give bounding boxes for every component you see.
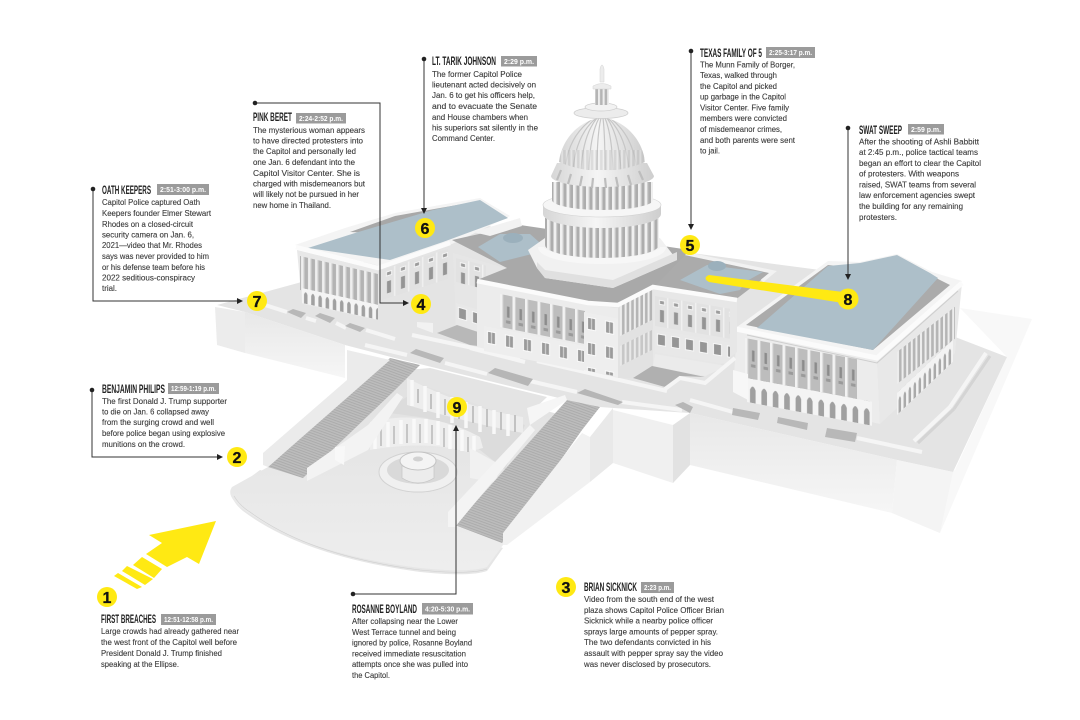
- Senate south facade: [378, 245, 455, 320]
- text block: oath keepers: or his defense team before his: [102, 262, 206, 272]
- fountain: [379, 452, 457, 492]
- text block: benjamin philips: to die on Jan. 6 collapsed away: [102, 406, 210, 416]
- text block: texas family of 5: [700, 46, 815, 156]
- marker 1: [97, 587, 117, 607]
- text block: benjamin philips: before police began using explosive: [102, 428, 225, 438]
- left roof slate patch: [478, 234, 548, 262]
- text block: texas family of 5: the Capitol and picked: [700, 81, 777, 91]
- terrace: front retaining walls: [215, 307, 953, 533]
- text block: texas family of 5: members were convicted: [700, 113, 787, 123]
- marker 1: 1: [103, 590, 112, 607]
- text block: oath keepers: Capitol Police captured Oath: [102, 197, 200, 207]
- text block: first breaches: [101, 612, 239, 669]
- link block: [453, 253, 505, 345]
- marker 4: 4: [417, 297, 426, 314]
- text block: swat sweep: [859, 123, 981, 222]
- text block: lt. tarik johnson: [432, 54, 538, 143]
- text block: brian sicknick: was never disclosed by prosecutors.: [583, 659, 711, 669]
- text block: rosanne boyland: After collapsing near the Lower: [352, 616, 458, 626]
- text block: benjamin philips: munitions on the crowd.: [102, 439, 185, 449]
- lantern rings: [574, 103, 628, 118]
- curved front wall: [370, 417, 483, 452]
- dome base: [528, 238, 677, 288]
- marker 6: [415, 218, 435, 238]
- text block: first breaches: the west front of the Capitol well before: [101, 637, 237, 647]
- text block: rosanne boyland: West Terrace tunnel and being: [352, 627, 456, 637]
- text block: oath keepers: security camera on Jan. 6,: [102, 230, 194, 240]
- text block: oath keepers: 2:51-3:00 p.m.: [160, 187, 206, 194]
- text block: pink beret: 2:24-2:52 p.m.: [299, 116, 343, 123]
- text block: pink beret: will likely not be pursued in her: [252, 189, 359, 199]
- text block: texas family of 5: up garbage in the Capitol: [700, 92, 786, 102]
- Senate wing: [295, 198, 510, 346]
- text block: swat sweep: at 2:45 p.m., police tactical teams: [859, 147, 979, 157]
- text block: brian sicknick: The two defendants convicted in his: [584, 637, 712, 647]
- Senate roof: [295, 198, 510, 266]
- text block: pink beret: one Jan. 6 defendant into the: [253, 157, 355, 167]
- text block: benjamin philips: 12:59-1:19 p.m.: [171, 386, 216, 393]
- text block: brian sicknick: [583, 580, 724, 669]
- right stair walls: [448, 395, 613, 545]
- text block: swat sweep: of protesters. With weapons: [859, 168, 960, 178]
- House front facade: [733, 330, 880, 424]
- text block: oath keepers: 2022 seditious-conspiracy: [102, 272, 196, 282]
- text block: texas family of 5: Texas, walked through: [700, 70, 777, 80]
- leader: rosanne boyland: [351, 425, 459, 596]
- center corner facade: [618, 288, 653, 378]
- marker 3: [556, 577, 576, 597]
- marker 2: 2: [233, 450, 242, 467]
- marker 9: [447, 397, 467, 417]
- text block: lt. tarik johnson: Jan. 6 to get his officers help,: [432, 90, 535, 100]
- text block: swat sweep: After the shooting of Ashli Babbitt: [859, 136, 980, 146]
- leader: texas family: [688, 49, 694, 230]
- text block: pink beret: [252, 110, 366, 210]
- text block: oath keepers: Rhodes on a closed-circuit: [102, 219, 194, 229]
- text block: oath keepers: Keepers founder Elmer Stewart: [102, 208, 212, 218]
- text block: first breaches: Large crowds had already gathered near: [101, 626, 239, 636]
- text block: texas family of 5: The Munn Family of Borger,: [700, 60, 795, 70]
- text block: benjamin philips: [102, 382, 227, 449]
- yellow breach arrow: [114, 521, 216, 589]
- text block: lt. tarik johnson: his superiors sat silently in the: [432, 122, 538, 132]
- text block: pink beret: the Capitol and personally led: [253, 146, 356, 156]
- text block: swat sweep: 2:59 p.m.: [911, 127, 941, 134]
- leader: swat sweep: [845, 126, 851, 280]
- text block: swat sweep: raised, SWAT teams from several: [859, 180, 976, 190]
- terrace: main deck: [217, 225, 1007, 472]
- text block: swat sweep: protesters.: [859, 212, 897, 222]
- upper drum: [552, 182, 653, 210]
- text block: brian sicknick: Sicknick while a nearby police officer: [584, 616, 713, 626]
- upper terrace floor: [407, 368, 547, 420]
- Senate west facade: [297, 250, 378, 320]
- right link facade: [653, 288, 737, 377]
- colonnade base ring: [541, 247, 663, 261]
- House roof: [737, 254, 962, 358]
- terrace: rails and small steps: [265, 305, 990, 452]
- text block: oath keepers: [102, 183, 212, 293]
- roof slate patch, right link: [680, 265, 763, 294]
- text block: texas family of 5: TEXAS FAMILY OF 5: [700, 46, 762, 60]
- leader: pink beret: [253, 101, 409, 306]
- House east facade: [877, 283, 962, 424]
- text block: brian sicknick: plaza shows Capitol Police Officer Brian: [584, 605, 724, 615]
- dome: [528, 65, 677, 288]
- text block: pink beret: PINK BERET: [253, 110, 292, 124]
- marker 6: 6: [421, 221, 430, 238]
- text block: pink beret: charged with misdemeanors but: [253, 178, 366, 188]
- text block: first breaches: President Donald J. Trump finished: [101, 648, 222, 658]
- marker 8: 8: [844, 292, 853, 309]
- main colonnade: [545, 218, 659, 258]
- center roof: [452, 225, 690, 303]
- text block: brian sicknick: BRIAN SICKNICK: [584, 580, 637, 594]
- text block: pink beret: to have directed protesters into: [253, 136, 363, 146]
- marker 2: [227, 447, 247, 467]
- lower ring: [543, 205, 661, 228]
- marker 5: [680, 235, 700, 255]
- leader: tarik johnson: [421, 57, 427, 214]
- text block: lt. tarik johnson: 2:29 p.m.: [504, 59, 534, 66]
- marker 7: [247, 291, 267, 311]
- marker 5: 5: [686, 238, 695, 255]
- text block: oath keepers: OATH KEEPERS: [102, 183, 151, 197]
- text block: first breaches: 12:51-12:58 p.m.: [164, 617, 213, 624]
- text block: pink beret: new home in Thailand.: [253, 200, 331, 210]
- marker 4: [411, 294, 431, 314]
- lantern colonnade: [595, 86, 609, 105]
- text block: oath keepers: 2021—video that Mr. Rhodes: [102, 240, 203, 250]
- text block: texas family of 5: of misdemeanor crimes,: [700, 124, 782, 134]
- plaza: lower west terrace: [230, 350, 613, 574]
- dome ribs: [559, 118, 645, 170]
- text block: benjamin philips: from the surging crowd and well: [102, 417, 214, 427]
- flared band: [551, 163, 654, 187]
- center building: [452, 218, 737, 389]
- text block: texas family of 5: to jail.: [700, 146, 720, 156]
- marker 8: [838, 288, 858, 310]
- left staircase: [268, 358, 420, 478]
- text block: rosanne boyland: the Capitol.: [352, 670, 390, 680]
- text block: texas family of 5: and both parents were sent: [700, 135, 796, 145]
- text block: swat sweep: law enforcement agencies swept: [859, 190, 976, 200]
- leader: oath keepers: [91, 187, 243, 304]
- text block: rosanne boyland: ROSANNE BOYLAND: [352, 602, 417, 616]
- text block: benjamin philips: BENJAMIN PHILIPS: [102, 382, 165, 396]
- text block: brian sicknick: 2:23 p.m.: [644, 585, 671, 592]
- lantern cap and statue: [593, 65, 611, 89]
- marker 7: 7: [253, 294, 262, 311]
- text block: texas family of 5: Visitor Center. Five family: [700, 102, 790, 112]
- leader: benjamin philips: [90, 388, 223, 460]
- dome shell: [559, 118, 645, 171]
- text block: pink beret: The mysterious woman appears: [253, 125, 366, 135]
- marker 9: 9: [453, 400, 462, 417]
- text block: brian sicknick: sprays large amounts of pepper spray.: [584, 626, 718, 636]
- yellow route band: [706, 275, 843, 303]
- text block: rosanne boyland: [352, 602, 473, 680]
- right courtyard: [633, 366, 705, 387]
- right staircase: [455, 400, 600, 543]
- back arched wall: [407, 378, 523, 433]
- text block: pink beret: Capitol Visitor Center. She is: [253, 168, 361, 178]
- marker 3: 3: [562, 580, 571, 597]
- ventilator drums: [503, 233, 726, 271]
- text block: swat sweep: SWAT SWEEP: [859, 123, 902, 137]
- text block: brian sicknick: Video from the south end of the west: [584, 594, 715, 604]
- House wing: [612, 248, 962, 426]
- text block: oath keepers: says was never provided to him: [102, 251, 209, 261]
- text block: brian sicknick: assault with pepper spray say the video: [584, 648, 723, 658]
- text block: lt. tarik johnson: LT. TARIK JOHNSON: [432, 54, 496, 68]
- text block: lt. tarik johnson: and House chambers when: [432, 112, 528, 122]
- text block: rosanne boyland: ignored by police, Rosanne Boyland: [352, 638, 472, 648]
- text block: rosanne boyland: 4:20-5:30 p.m.: [425, 606, 470, 614]
- terrace: outer side plane: [892, 308, 1032, 533]
- text block: lt. tarik johnson: Command Center.: [432, 133, 495, 143]
- text block: texas family of 5: 2:25-3:17 p.m.: [769, 50, 812, 57]
- text block: first breaches: FIRST BREACHES: [101, 612, 156, 626]
- recess floor: [382, 395, 525, 470]
- text block: lt. tarik johnson: The former Capitol Police: [432, 69, 522, 79]
- text block: first breaches: speaking at the Ellipse.: [101, 659, 179, 669]
- text block: oath keepers: trial.: [102, 283, 117, 293]
- illustration: U.S. Capitol 3D model: [215, 65, 1032, 574]
- center west facade: [477, 283, 618, 378]
- text block: swat sweep: the building for any remaining: [859, 201, 963, 211]
- Senate courtyard: [437, 325, 478, 346]
- text block: rosanne boyland: received immediate resuscitation: [352, 648, 466, 658]
- back parapet, left: [473, 218, 522, 236]
- text block: benjamin philips: The first Donald J. Trump supporter: [102, 396, 227, 406]
- text block: rosanne boyland: attempts once she was pulled into: [352, 659, 468, 669]
- left stair walls: [263, 350, 403, 481]
- right link roof: [612, 248, 773, 304]
- text block: lt. tarik johnson: and to evacuate the Senate: [432, 101, 537, 111]
- text block: swat sweep: began an effort to clear the Capitol: [859, 158, 981, 168]
- text block: lt. tarik johnson: lieutenant acted decisively on: [432, 80, 536, 90]
